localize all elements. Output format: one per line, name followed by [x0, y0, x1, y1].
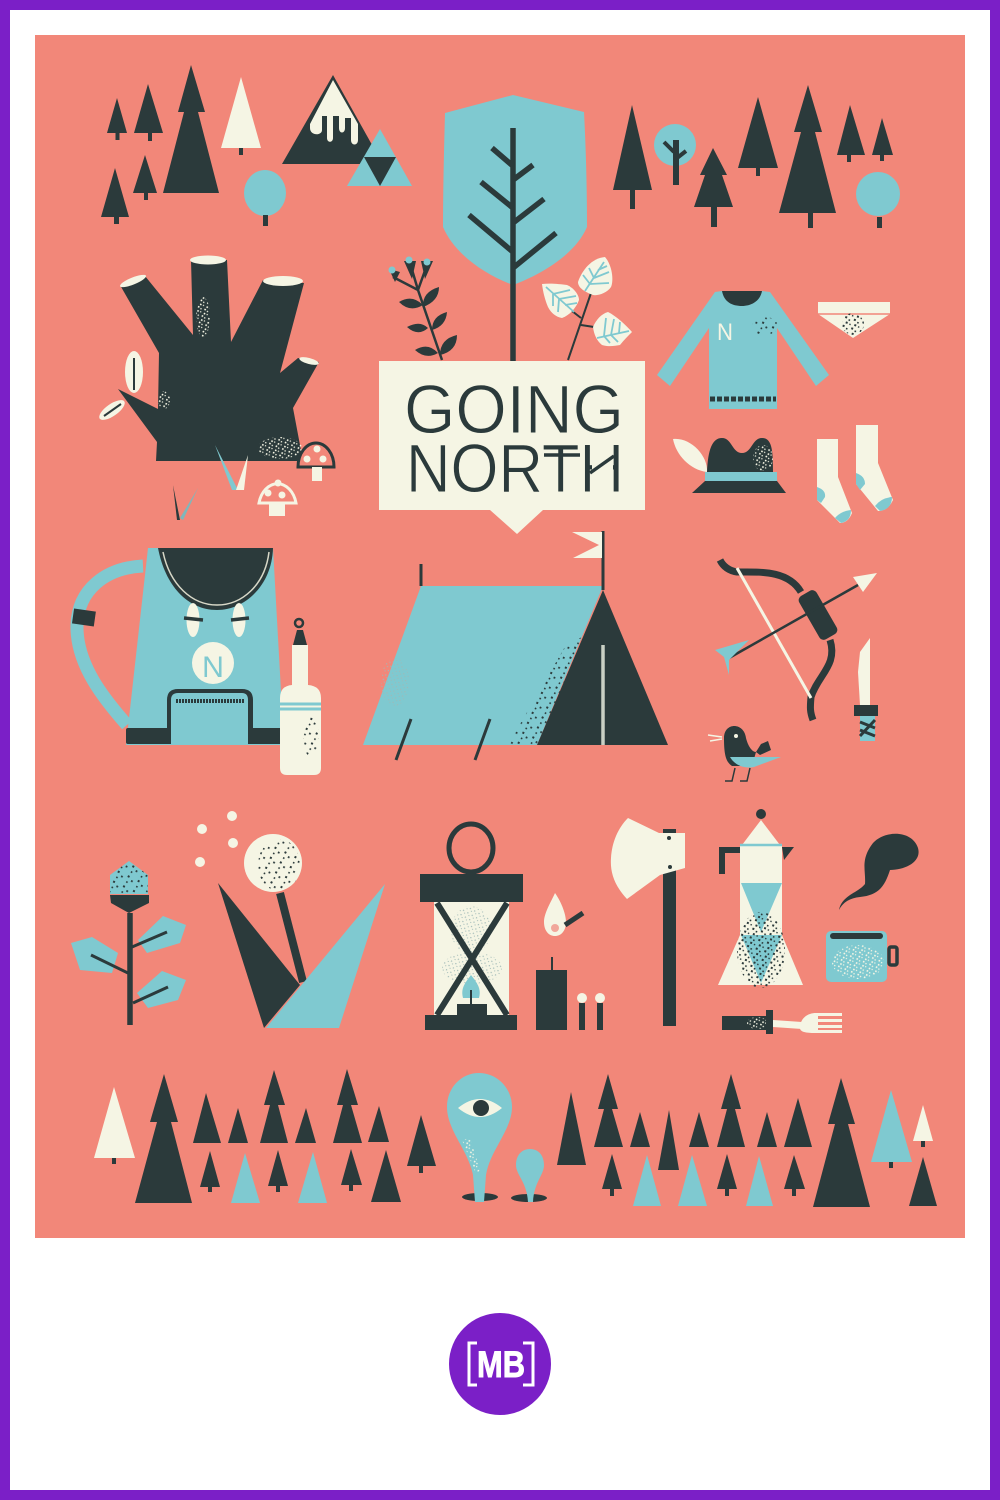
icon: dandelion [195, 811, 385, 1028]
logo: MB badge: MB [477, 1344, 525, 1385]
icon: tent [363, 531, 668, 760]
icon: grass tufts [173, 445, 248, 520]
icon: underwear [818, 302, 890, 338]
icon: sweater: N [717, 319, 733, 346]
icon: sweater [657, 291, 829, 409]
icon: map pin with eye [447, 1073, 512, 1202]
icon: bottle [280, 619, 321, 775]
icon: mug [826, 931, 897, 982]
icon: dark-outlined mushroom [298, 443, 334, 481]
poster background [35, 35, 965, 1238]
icon: shield with tree [443, 95, 587, 361]
icon: steam [839, 834, 919, 910]
title: GOING NORTH: GOING [404, 371, 624, 448]
icon: right sock [856, 425, 893, 511]
icon: moka pot [718, 809, 803, 988]
tree row: bottom right [557, 1074, 937, 1207]
icon: feathered hat [673, 438, 786, 493]
icon: cream mushroom [259, 480, 296, 516]
icon: candle and matches [536, 957, 605, 1030]
icon: left sock [817, 439, 852, 523]
icon: tree stump [96, 256, 319, 461]
icon: dark fern with flowers [388, 256, 457, 360]
logo: MB badge [449, 1313, 551, 1415]
icon: cream leaf sprig [542, 257, 632, 360]
icon: snowy mountain [282, 75, 412, 186]
tree cluster: top left [101, 65, 286, 226]
icon: backpack: N [202, 651, 224, 684]
icon: knife [854, 638, 878, 741]
icon: small map pin [511, 1149, 547, 1202]
icon: lit match [544, 893, 583, 936]
icon: lantern [420, 824, 523, 1030]
title sign [379, 361, 645, 534]
icon: fork [722, 1010, 842, 1034]
tree row: bottom left [94, 1069, 436, 1203]
icon: bird [708, 726, 781, 781]
icon: bow and arrow [715, 560, 877, 720]
title: GOING NORTH: NORTH [406, 430, 624, 507]
title: GOING NORTH [404, 371, 624, 507]
icon: backpack [72, 548, 284, 745]
icon: hex flower plant [71, 861, 186, 1025]
icon: axe [611, 818, 685, 1026]
tree cluster: top right [613, 85, 900, 228]
